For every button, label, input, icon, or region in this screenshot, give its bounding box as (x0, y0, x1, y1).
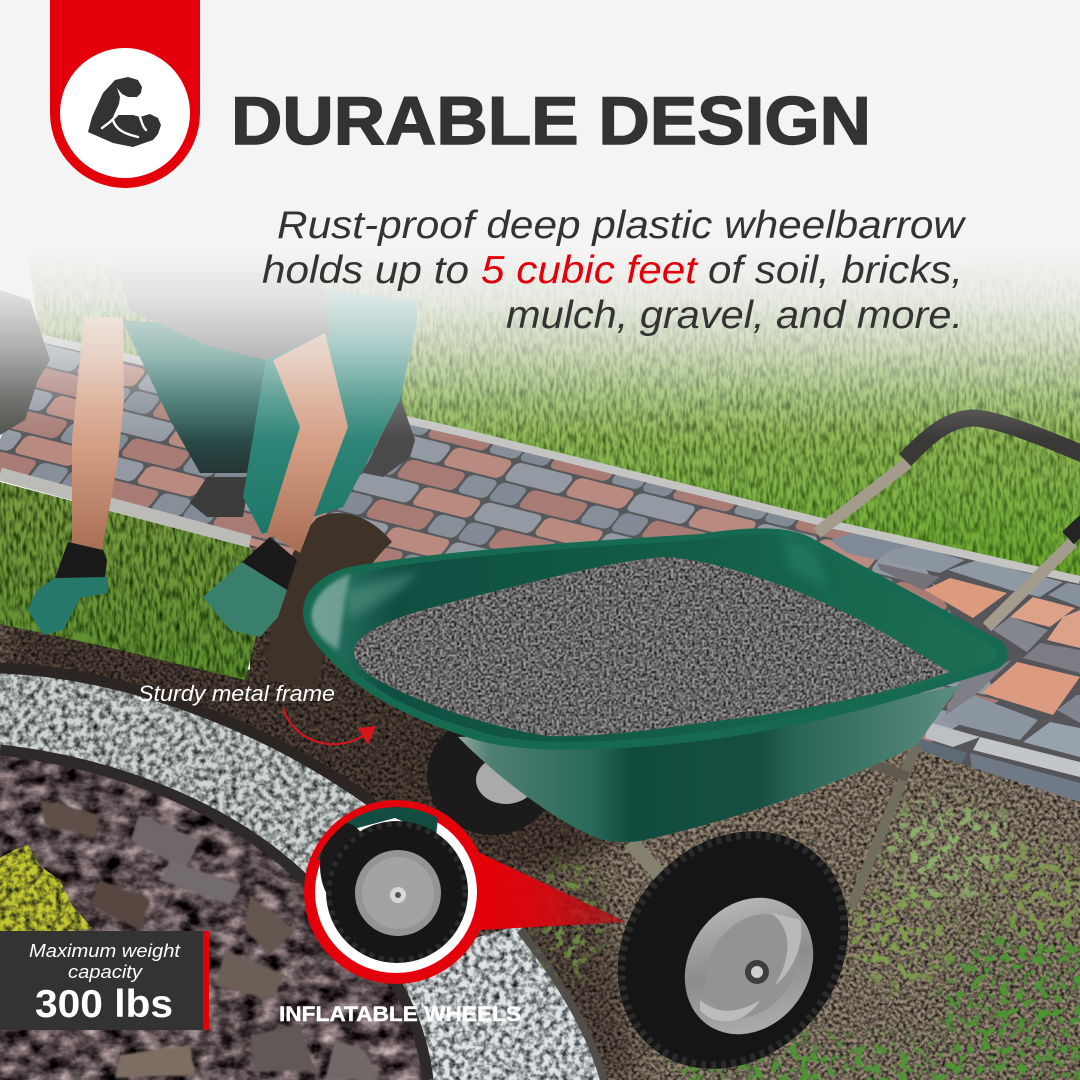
callout: sturdy metal frame (138, 681, 376, 745)
kerb: lower left (0, 474, 250, 542)
weight capacity panel: Maximum weight (29, 940, 181, 961)
handles (817, 463, 908, 533)
wheel (326, 821, 468, 963)
person gardening (0, 250, 417, 637)
tray rim (303, 528, 1008, 750)
glove: right (203, 562, 287, 637)
kerb: top (40, 338, 1080, 580)
shrub (0, 845, 92, 931)
arm: right (267, 333, 348, 553)
glove: left (28, 577, 108, 635)
glove: left cuff (55, 542, 107, 578)
callout: sturdy metal frame: Sturdy metal frame (138, 681, 335, 706)
description text: 5 cubic feet (481, 249, 699, 292)
bucket (0, 290, 50, 435)
glove: right cuff (242, 537, 297, 590)
soil (0, 540, 1080, 1080)
frame legs (851, 745, 917, 907)
badge icon: flexed arm (50, 0, 200, 188)
lens (304, 800, 488, 984)
callout: inflatable wheel zoom (304, 800, 626, 984)
weight capacity panel (0, 931, 209, 1030)
tray body (458, 685, 960, 842)
wheelbarrow product (303, 418, 1080, 1080)
trousers: thigh (122, 320, 270, 473)
title: DURABLE DESIGN (231, 83, 871, 159)
pointer (480, 853, 626, 930)
boots (190, 477, 250, 517)
weight capacity panel: capacity (68, 961, 144, 982)
paving path (0, 334, 1080, 802)
lawn: turf roll left (0, 480, 270, 680)
weight capacity panel: 300 lbs (35, 983, 173, 1026)
weeds (538, 795, 1080, 1080)
lawn: right (31, 265, 1080, 576)
label: inflatable wheels: INFLATABLE WHEELS (279, 1003, 521, 1026)
photo scene: garden (0, 265, 1080, 1080)
front wheel (570, 785, 896, 1080)
description text: mulch, gravel, and more. (506, 294, 963, 337)
gravel load (354, 557, 950, 736)
tray interior (312, 534, 997, 742)
top white fade (0, 0, 1080, 440)
arrow (283, 708, 368, 744)
description text: holds up to (262, 249, 469, 292)
rear wheel (427, 715, 557, 835)
tray highlights (312, 574, 350, 650)
edging and stones (0, 660, 620, 1080)
trousers: front leg (243, 290, 417, 534)
soil mound (268, 513, 392, 690)
description text: Rust-proof deep plastic wheelbarrow (277, 204, 967, 247)
description text (262, 204, 967, 337)
description text: of soil, bricks, (708, 249, 963, 292)
arm: left (72, 317, 124, 550)
shirt (110, 250, 330, 360)
